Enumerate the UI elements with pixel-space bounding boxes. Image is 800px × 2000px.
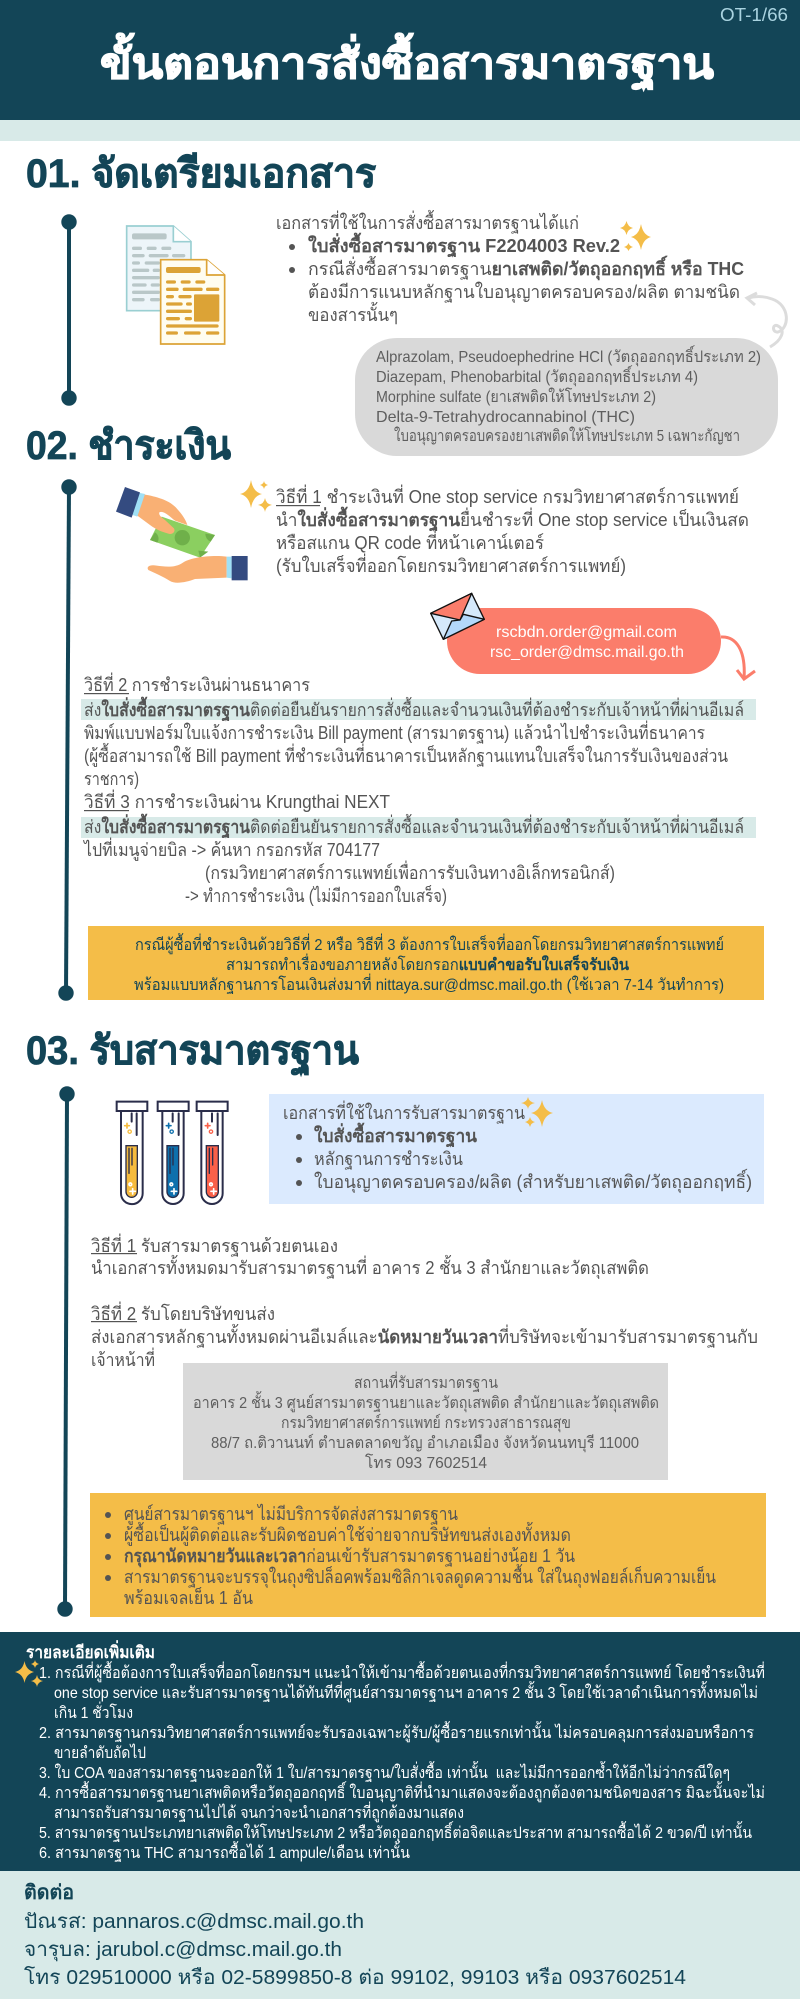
details list: เกิน 1 ชั่วโมง [54, 1701, 133, 1722]
text block: pickup methods: เจ้าหน้าที่ [91, 1347, 155, 1370]
contact lines: ปัณรส: pannaros.c@dmsc.mail.go.th [24, 1911, 364, 1933]
contact lines: จารุบล: jarubol.c@dmsc.mail.go.th [24, 1939, 342, 1962]
panel: delivery notes: สารมาตรฐานจะบรรจุในถุงซิปล็อคพร้อมซิลิกาเจลดูดความชื้น ใส่ในถุงฟอยล์เก็บความเย็น [124, 1564, 716, 1588]
text block: method 3: ไปที่เมนูจ่ายบิล -> ค้นหา กรอกรหัส 704177 [82, 837, 380, 861]
text block: method 3: (กรมวิทยาศาสตร์การแพทย์เพื่อการรับเงินทางอิเล็กทรอนิกส์) [205, 860, 615, 883]
text block: method 1: วิธีที่ 1 ชำระเงินที่ One stop service กรมวิทยาศาสตร์การแพทย์ [276, 484, 739, 507]
text block: pickup methods: นำเอกสารทั้งหมดมารับสารมาตรฐานที่ อาคาร 2 ชั้น 3 สำนักยาและวัตถุเสพติด [91, 1255, 649, 1279]
callout: receipt request: สามารถทำเรื่องขอภายหลังโดยกรอกแบบคำขอรับใบเสร็จรับเงิน [226, 953, 629, 974]
panel: pickup location: สถานที่รับสารมาตรฐาน [354, 1371, 498, 1392]
details list [39, 1661, 765, 1862]
text block: documents for ordering: ของสารนั้นๆ [308, 302, 398, 325]
text block: pickup methods: วิธีที่ 2 รับโดยบริษัทขนส่ง [91, 1301, 275, 1324]
panel: controlled substances note: Diazepam, Phenobarbital (วัตถุออกฤทธิ์ประเภท 4) [376, 365, 698, 387]
icon: sparkle 4 [15, 1660, 43, 1687]
text block: method 3 [81, 789, 756, 906]
text block: documents for ordering: เอกสารที่ใช้ในการสั่งซื้อสารมาตรฐานได้แก่ [276, 210, 579, 234]
panel: controlled substances note: Delta-9-Tetrahydrocannabinol (THC) [376, 409, 635, 426]
panel: delivery notes [90, 1493, 766, 1617]
header banner [0, 0, 800, 141]
text block: method 1: (รับใบเสร็จที่ออกโดยกรมวิทยาศาสตร์การแพทย์) [276, 553, 626, 576]
callout: receipt request: พร้อมแบบหลักฐานการโอนเงินส่งมาที่ nittaya.sur@dmsc.mail.go.th (ใช้เวลา 7-14 วันทำการ) [134, 973, 724, 994]
text block: pickup methods: วิธีที่ 1 รับสารมาตรฐานด้วยตนเอง [91, 1233, 338, 1257]
callout: order emails: rsc_order@dmsc.mail.go.th [490, 644, 684, 661]
panel: pickup location: 88/7 ถ.ติวานนท์ ตำบลตลาดขวัญ อำเภอเมือง จังหวัดนนทบุรี 11000 [211, 1433, 639, 1453]
text block: documents for ordering: ใบสั่งซื้อสารมาตรฐาน F2204003 Rev.2 [308, 232, 620, 258]
icon: test tubes [117, 1102, 228, 1204]
panel: controlled substances note: Alprazolam, Pseudoephedrine HCl (วัตถุออกฤทธิ์ประเภท 2) [376, 345, 761, 367]
timeline: step 02 [58, 479, 77, 1001]
text block: documents for ordering [276, 210, 744, 325]
details list: สามารถรับสารมาตรฐานไปได้ จนกว่าจะนำเอกสารที่ถูกต้องมาแสดง [54, 1801, 464, 1823]
timeline: step 01 [61, 214, 77, 406]
document code: OT-1/66 [720, 5, 788, 25]
panel: delivery notes: กรุณานัดหมายวันและเวลาก่อนเข้ารับสารมาตรฐานอย่างน้อย 1 วัน [124, 1546, 575, 1568]
callout: order emails: rscbdn.order@gmail.com [496, 624, 677, 641]
callout: receipt request: กรณีผู้ซื้อที่ชำระเงินด้วยวิธีที่ 2 หรือ วิธีที่ 3 ต้องการใบเสร็จที่ออกโดยกรมวิทยาศาสตร์การแพทย์ [135, 933, 724, 955]
text block: method 1 [276, 484, 749, 576]
panel: delivery notes: พร้อมเจลเย็น 1 อัน [124, 1586, 253, 1608]
panel: contact [0, 1871, 800, 1999]
text block: method 2: ราชการ) [84, 769, 139, 789]
contact lines: โทร 029510000 หรือ 02-5899850-8 ต่อ 99102, 99103 หรือ 0937602514 [24, 1966, 686, 1989]
panel: documents for receiving: เอกสารที่ใช้ในการรับสารมาตรฐาน [283, 1100, 525, 1124]
arrow: curl to note [747, 293, 786, 347]
panel: delivery notes: ศูนย์สารมาตรฐานฯ ไม่มีบริการจัดส่งสารมาตรฐาน [124, 1503, 458, 1525]
panel: pickup location: กรมวิทยาศาสตร์การแพทย์ กระทรวงสาธารณสุข [281, 1413, 571, 1433]
text block: pickup methods [91, 1233, 758, 1370]
panel: documents for receiving [269, 1094, 764, 1204]
heading: step 02: 02. ชำระเงิน [26, 424, 231, 468]
callout: receipt request [88, 926, 764, 1000]
text block: method 2: ส่งใบสั่งซื้อสารมาตรฐานติดต่อยืนยันรายการสั่งซื้อและจำนวนเงินที่ต้องชำระกับเจ้าหน้าที่ผ่านอีเมล์ [84, 696, 744, 722]
text block: pickup methods: ส่งเอกสารหลักฐานทั้งหมดผ่านอีเมล์และนัดหมายวันเวลาที่บริษัทจะเข้ามารับสารมาตรฐานกับ [91, 1324, 758, 1348]
panel: delivery notes: ผู้ซื้อเป็นผู้ติดต่อและรับผิดชอบค่าใช้จ่ายจากบริษัทขนส่งเองทั้งหมด [124, 1522, 571, 1546]
callout: order emails [447, 608, 721, 674]
details list: ขายลำดับถัดไป [54, 1743, 146, 1762]
panel: documents for receiving: ใบสั่งซื้อสารมาตรฐาน [314, 1122, 478, 1148]
panel: controlled substances note: Morphine sulfate (ยาเสพติดให้โทษประเภท 2) [376, 387, 656, 406]
icon: envelope [431, 593, 484, 639]
contact lines [24, 1911, 686, 1989]
text block: method 2 [81, 672, 756, 789]
text block: documents for ordering: กรณีสั่งซื้อสารมาตรฐานยาเสพติด/วัตถุออกฤทธิ์ หรือ THC [308, 255, 744, 281]
text block: method 3: วิธีที่ 3 การชำระเงินผ่าน Krungthai NEXT [84, 789, 390, 812]
panel: documents for receiving: หลักฐานการชำระเงิน [314, 1149, 463, 1170]
timeline: step 03 [57, 1086, 75, 1617]
details heading: รายละเอียดเพิ่มเติม [26, 1640, 155, 1662]
panel: pickup location [183, 1363, 668, 1480]
icon: hands exchanging money [116, 487, 248, 583]
heading: step 01: 01. จัดเตรียมเอกสาร [26, 152, 377, 196]
icon: sparkle 2 [240, 480, 272, 512]
contact heading: ติดต่อ [24, 1882, 74, 1904]
panel: documents for receiving: ใบอนุญาตครอบครอง/ผลิต (สำหรับยาเสพติด/วัตถุออกฤทธิ์) [314, 1168, 752, 1193]
icon: sparkle 3 [521, 1097, 553, 1127]
text block: documents for ordering: ต้องมีการแนบหลักฐานใบอนุญาตครอบครอง/ผลิต ตามชนิด [308, 281, 740, 303]
panel: additional details [0, 1632, 800, 1871]
text block: method 2: วิธีที่ 2 การชำระเงินผ่านธนาคาร [84, 672, 310, 695]
icon: documents [127, 226, 225, 344]
panel: controlled substances note [355, 338, 778, 456]
text block: method 3: ส่งใบสั่งซื้อสารมาตรฐานติดต่อยืนยันรายการสั่งซื้อและจำนวนเงินที่ต้องชำระกับเจ้าหน้าที่ผ่านอีเมล์ [84, 813, 744, 839]
panel: pickup location: โทร 093 7602514 [365, 1453, 487, 1472]
text block: method 1: หรือสแกน QR code ที่หน้าเคาน์เตอร์ [276, 530, 544, 553]
text block: method 3: -> ทำการชำระเงิน (ไม่มีการออกใบเสร็จ) [185, 884, 447, 906]
text block: method 1: นำใบสั่งซื้อสารมาตรฐานยื่นชำระที่ One stop service เป็นเงินสด [276, 506, 749, 532]
icon: sparkle 1 [620, 221, 651, 251]
details list: 6. สารมาตรฐาน THC สามารถซื้อได้ 1 ampule/เดือน เท่านั้น [39, 1841, 410, 1862]
text block: method 2: พิมพ์แบบฟอร์มใบแจ้งการชำระเงิน Bill payment (สารมาตรฐาน) แล้วนำไปชำระเงินที่ธนาคาร [84, 720, 705, 744]
title: ขั้นตอนการสั่งซื้อสารมาตรฐาน [100, 32, 714, 91]
panel: pickup location: อาคาร 2 ชั้น 3 ศูนย์สารมาตรฐานยาและวัตถุเสพติด สำนักยาและวัตถุเสพติด [193, 1391, 659, 1413]
arrow: down from emails [721, 637, 755, 679]
heading: step 03: 03. รับสารมาตรฐาน [26, 1029, 359, 1077]
